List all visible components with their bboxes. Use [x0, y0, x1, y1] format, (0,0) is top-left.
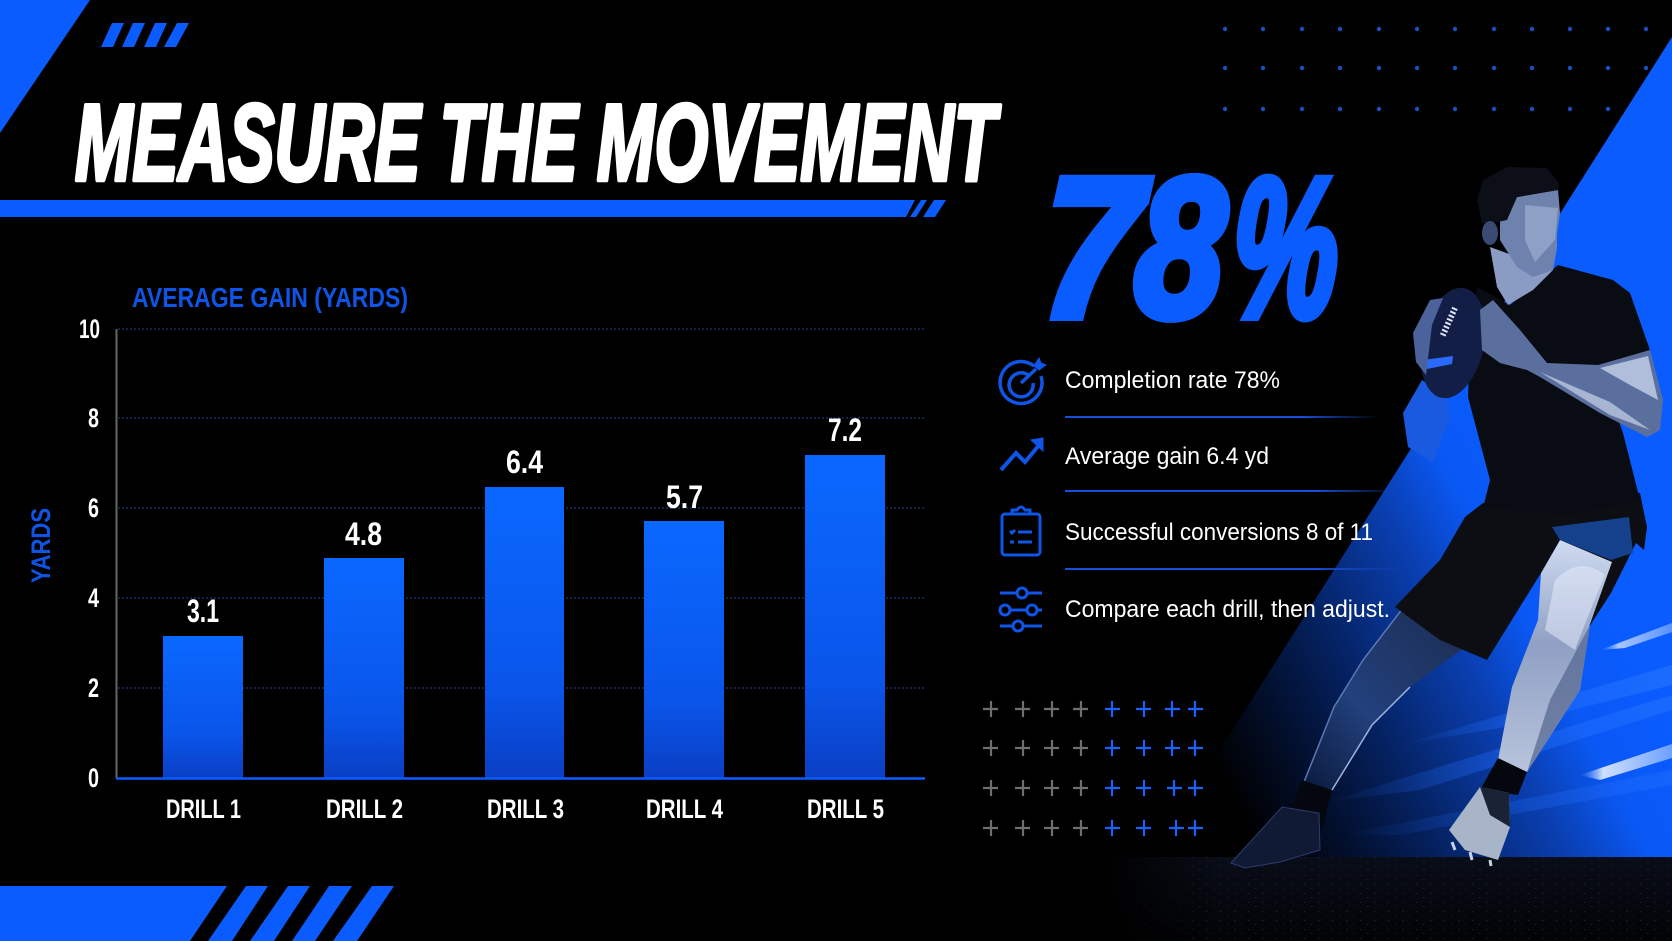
- corner shape top left: [0, 0, 90, 133]
- dividers: [1065, 416, 1400, 570]
- icon: clipboard: [1002, 507, 1040, 555]
- bar: drill 4: 5.7: [666, 479, 703, 515]
- bar: drill 3: [485, 444, 564, 824]
- blue diagonal background panel: [1150, 37, 1672, 860]
- torso shirt: [1468, 265, 1650, 515]
- hair: [1477, 167, 1559, 223]
- y axis ticks: [79, 314, 100, 793]
- neck: [1490, 247, 1553, 305]
- ear: [1482, 221, 1498, 245]
- football: [1411, 282, 1495, 404]
- bar: drill 5: [805, 412, 885, 824]
- completion rate text: Completion rate 78%: [1065, 367, 1280, 394]
- chart title: AVERAGE GAIN (YARDS): [132, 282, 408, 313]
- title underline bar: [0, 200, 946, 217]
- bar: drill 1: DRILL 1: [166, 794, 241, 824]
- y axis ticks: 10: [79, 314, 100, 344]
- top left stripes: [101, 23, 189, 47]
- icon: sliders: [1000, 588, 1042, 631]
- conversions text: Successful conversions 8 of 11: [1065, 519, 1373, 546]
- bar: drill 5: DRILL 5: [807, 794, 884, 824]
- bar chart: average gain: [26, 282, 925, 824]
- y axis title: YARDS: [26, 508, 56, 583]
- bar: drill 3: DRILL 3: [487, 794, 564, 824]
- dot grid: [1223, 27, 1648, 111]
- bar: drill 3: 6.4: [506, 444, 543, 480]
- compare text: Compare each drill, then adjust.: [1065, 596, 1390, 623]
- big stat 78%: 7: [1038, 137, 1152, 358]
- face: [1500, 190, 1560, 277]
- speed streaks: [1326, 623, 1672, 835]
- y axis ticks: 6: [88, 493, 99, 523]
- compression shorts: [1552, 517, 1633, 560]
- stat list: [1000, 358, 1400, 631]
- shorts: [1395, 493, 1647, 660]
- bar: drill 5: 7.2: [828, 412, 862, 448]
- bar: drill 1: [163, 593, 243, 824]
- big stat 78%: [1038, 137, 1344, 358]
- icon: trend arrow: [1001, 438, 1043, 470]
- front arm: [1480, 300, 1663, 437]
- y axis ticks: 0: [88, 763, 99, 793]
- hand on ball rear: [1413, 298, 1443, 375]
- bottom left stripes: [0, 886, 394, 941]
- title: MEASURE THE MOVEMENT: [75, 82, 1001, 204]
- bar: drill 1: 3.1: [187, 593, 219, 629]
- big stat 78%: 8: [1131, 137, 1230, 358]
- y axis ticks: 8: [88, 403, 99, 433]
- bar: drill 2: 4.8: [345, 516, 382, 552]
- rear leg: [1231, 608, 1468, 868]
- bar: drill 2: DRILL 2: [326, 794, 403, 824]
- big stat 78%: %: [1227, 137, 1344, 358]
- football player illustration: [1231, 167, 1663, 868]
- y axis ticks: 2: [88, 673, 99, 703]
- plus sign grid: [983, 701, 1203, 836]
- icon: target: [1000, 358, 1046, 404]
- bar: drill 2: [324, 516, 404, 824]
- ground: [1100, 857, 1672, 941]
- rear arm: [1403, 380, 1450, 462]
- average gain text: Average gain 6.4 yd: [1065, 443, 1269, 470]
- front leg: [1449, 540, 1615, 866]
- bar: drill 4: [644, 479, 724, 824]
- bar: drill 4: DRILL 4: [646, 794, 723, 824]
- y axis ticks: 4: [88, 583, 99, 613]
